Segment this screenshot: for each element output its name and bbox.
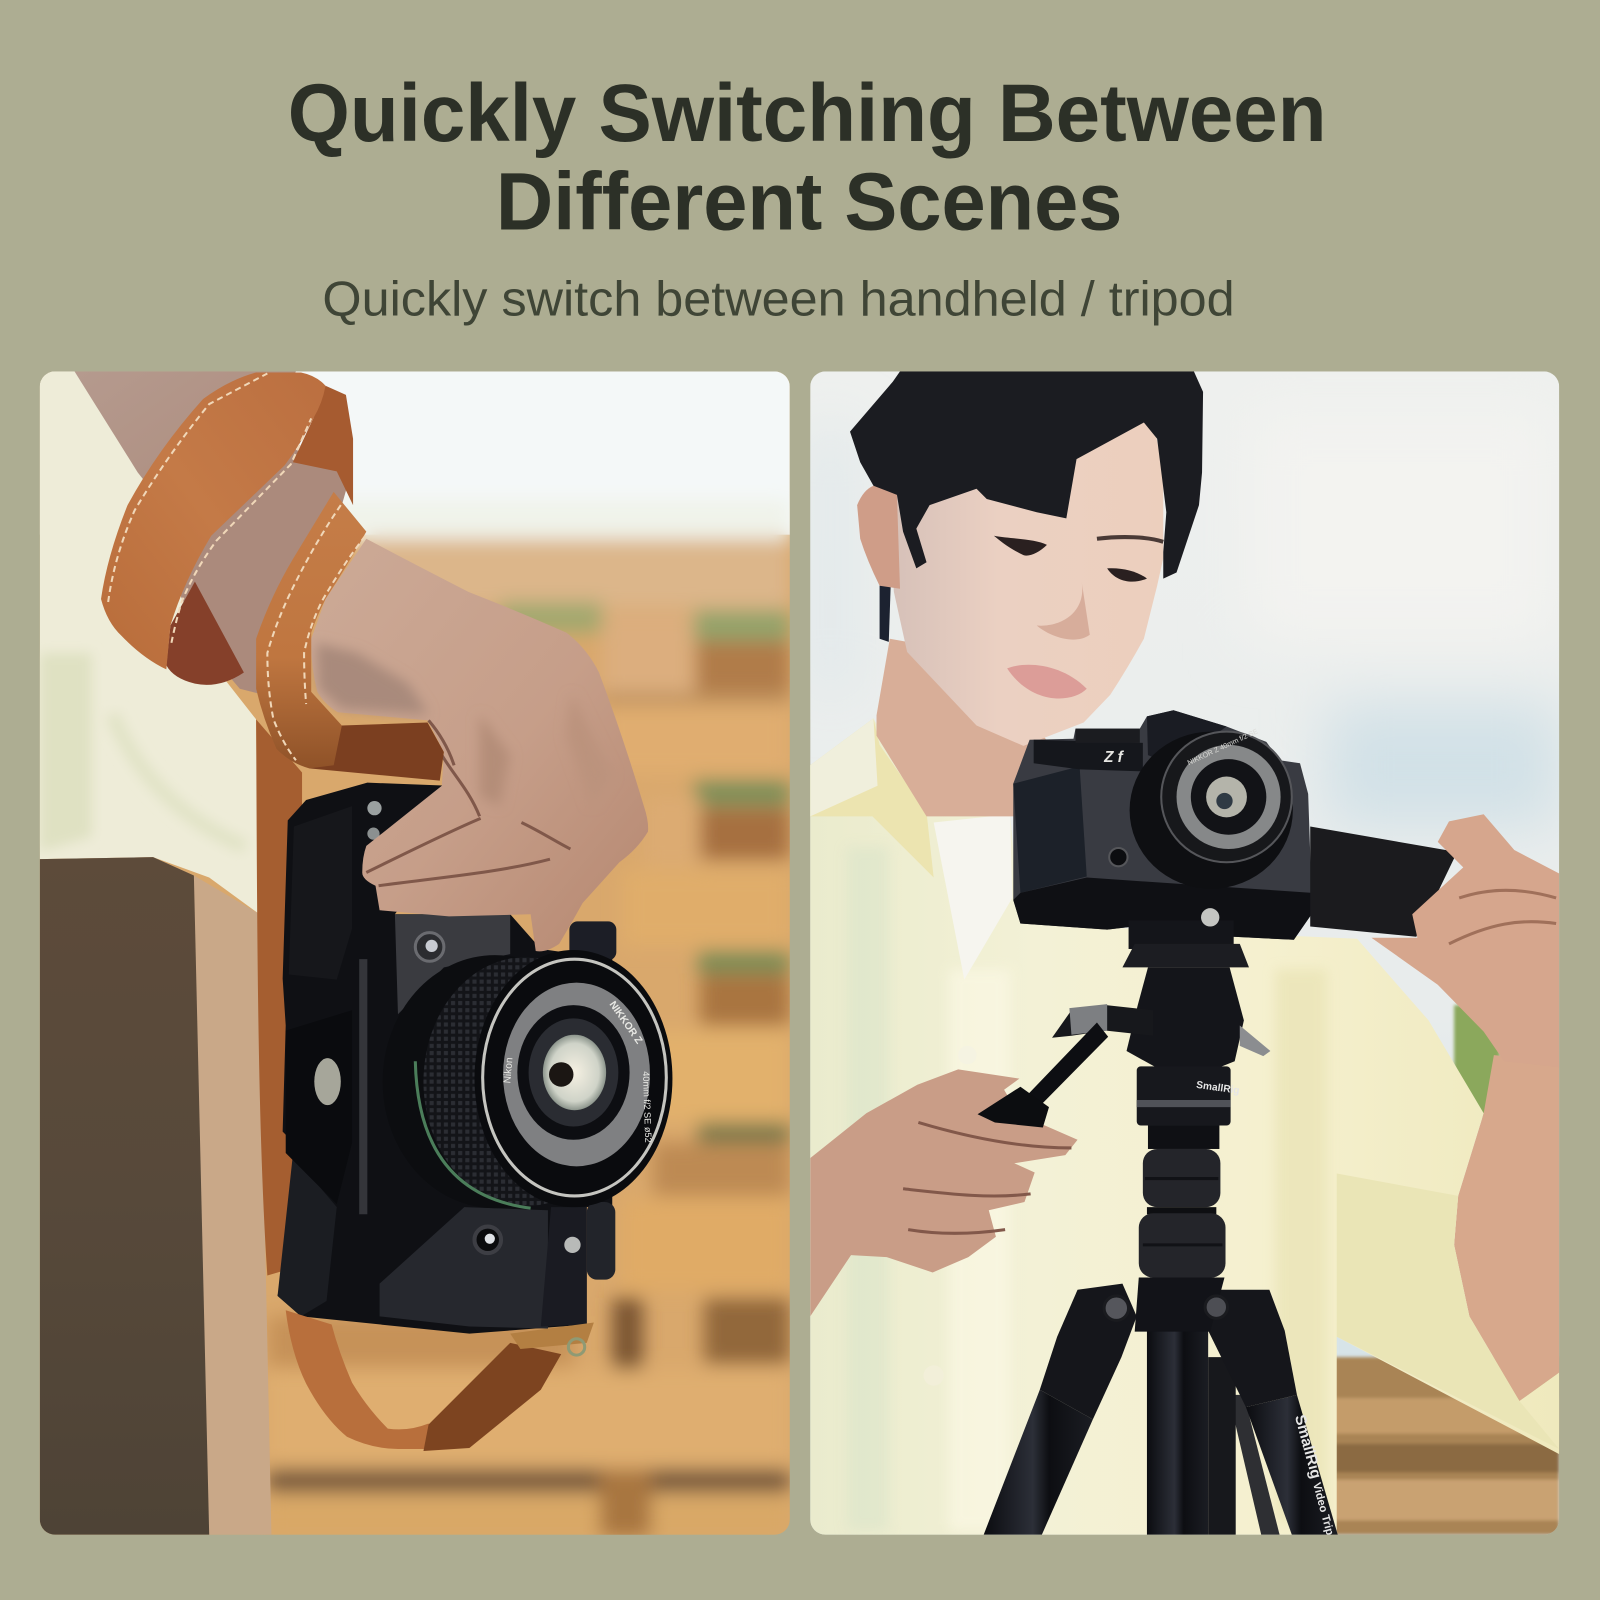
subtitle: Quickly switch between handheld / tripod	[322, 272, 1235, 326]
shirt	[40, 371, 258, 913]
face	[888, 420, 1163, 746]
front strap band	[101, 372, 326, 669]
lower button	[474, 1227, 501, 1253]
white t-shirt	[934, 814, 1012, 980]
hand gripping camera	[311, 539, 648, 951]
lips	[1007, 665, 1087, 698]
tripod legs and hub	[984, 1278, 1343, 1550]
back loop of the strap	[293, 386, 353, 505]
lens: 40mm f/2 SE ø52	[641, 1071, 653, 1143]
pan handle and grip	[978, 1022, 1108, 1128]
forearm	[74, 372, 296, 479]
right hand holding screen	[1371, 814, 1559, 1067]
inner dark strap	[166, 582, 244, 685]
lens: Nikon	[502, 1057, 515, 1084]
camera model mark: Z f	[1103, 749, 1125, 766]
tripod column	[1137, 1066, 1240, 1278]
hair	[850, 371, 1203, 579]
left hand	[810, 1069, 1078, 1316]
lens on tripod camera	[1130, 727, 1293, 889]
strap lug screw	[415, 933, 444, 961]
right arm	[1454, 1055, 1559, 1401]
wrist	[180, 450, 346, 693]
shirt folds	[40, 653, 245, 852]
bracket screws	[367, 801, 382, 815]
sideburn	[880, 582, 891, 642]
camera body on tripod	[1013, 710, 1312, 940]
lens marking text: NIKKOR Z 40mm f/2 SE	[1186, 727, 1259, 767]
title: Quickly Switching Between	[288, 68, 1327, 159]
lower strap around wrist	[256, 492, 444, 781]
ear	[857, 486, 900, 589]
quick release knob	[314, 1058, 341, 1105]
neck	[877, 639, 1051, 816]
lens markings: NIKKOR Z	[607, 999, 644, 1046]
lens	[383, 950, 672, 1208]
blurred wooden fence and sky background	[40, 371, 790, 1537]
shorts	[40, 857, 271, 1535]
nose	[1037, 582, 1090, 640]
sky background	[810, 371, 1559, 1535]
clouds	[810, 408, 1559, 827]
flip screen	[1310, 827, 1457, 937]
panel: tripod photo	[810, 371, 1559, 1550]
eyebrow	[1097, 537, 1163, 542]
hanging strap	[256, 719, 302, 1276]
title: Different Scenes	[496, 157, 1122, 248]
top and bottom dials	[569, 921, 616, 960]
tripod head	[1052, 908, 1270, 1073]
shirt	[810, 718, 1559, 1535]
fence and foliage	[1327, 1005, 1559, 1535]
title	[288, 68, 1327, 248]
panel: handheld photo	[40, 371, 790, 1537]
brand on head: SmallRig	[1196, 1080, 1240, 1097]
camera L-bracket and body	[278, 783, 616, 1334]
eyes	[994, 536, 1047, 556]
tripod leg brand: SmallRig Video Tripod	[1291, 1413, 1343, 1550]
bottom strap	[286, 1310, 594, 1451]
